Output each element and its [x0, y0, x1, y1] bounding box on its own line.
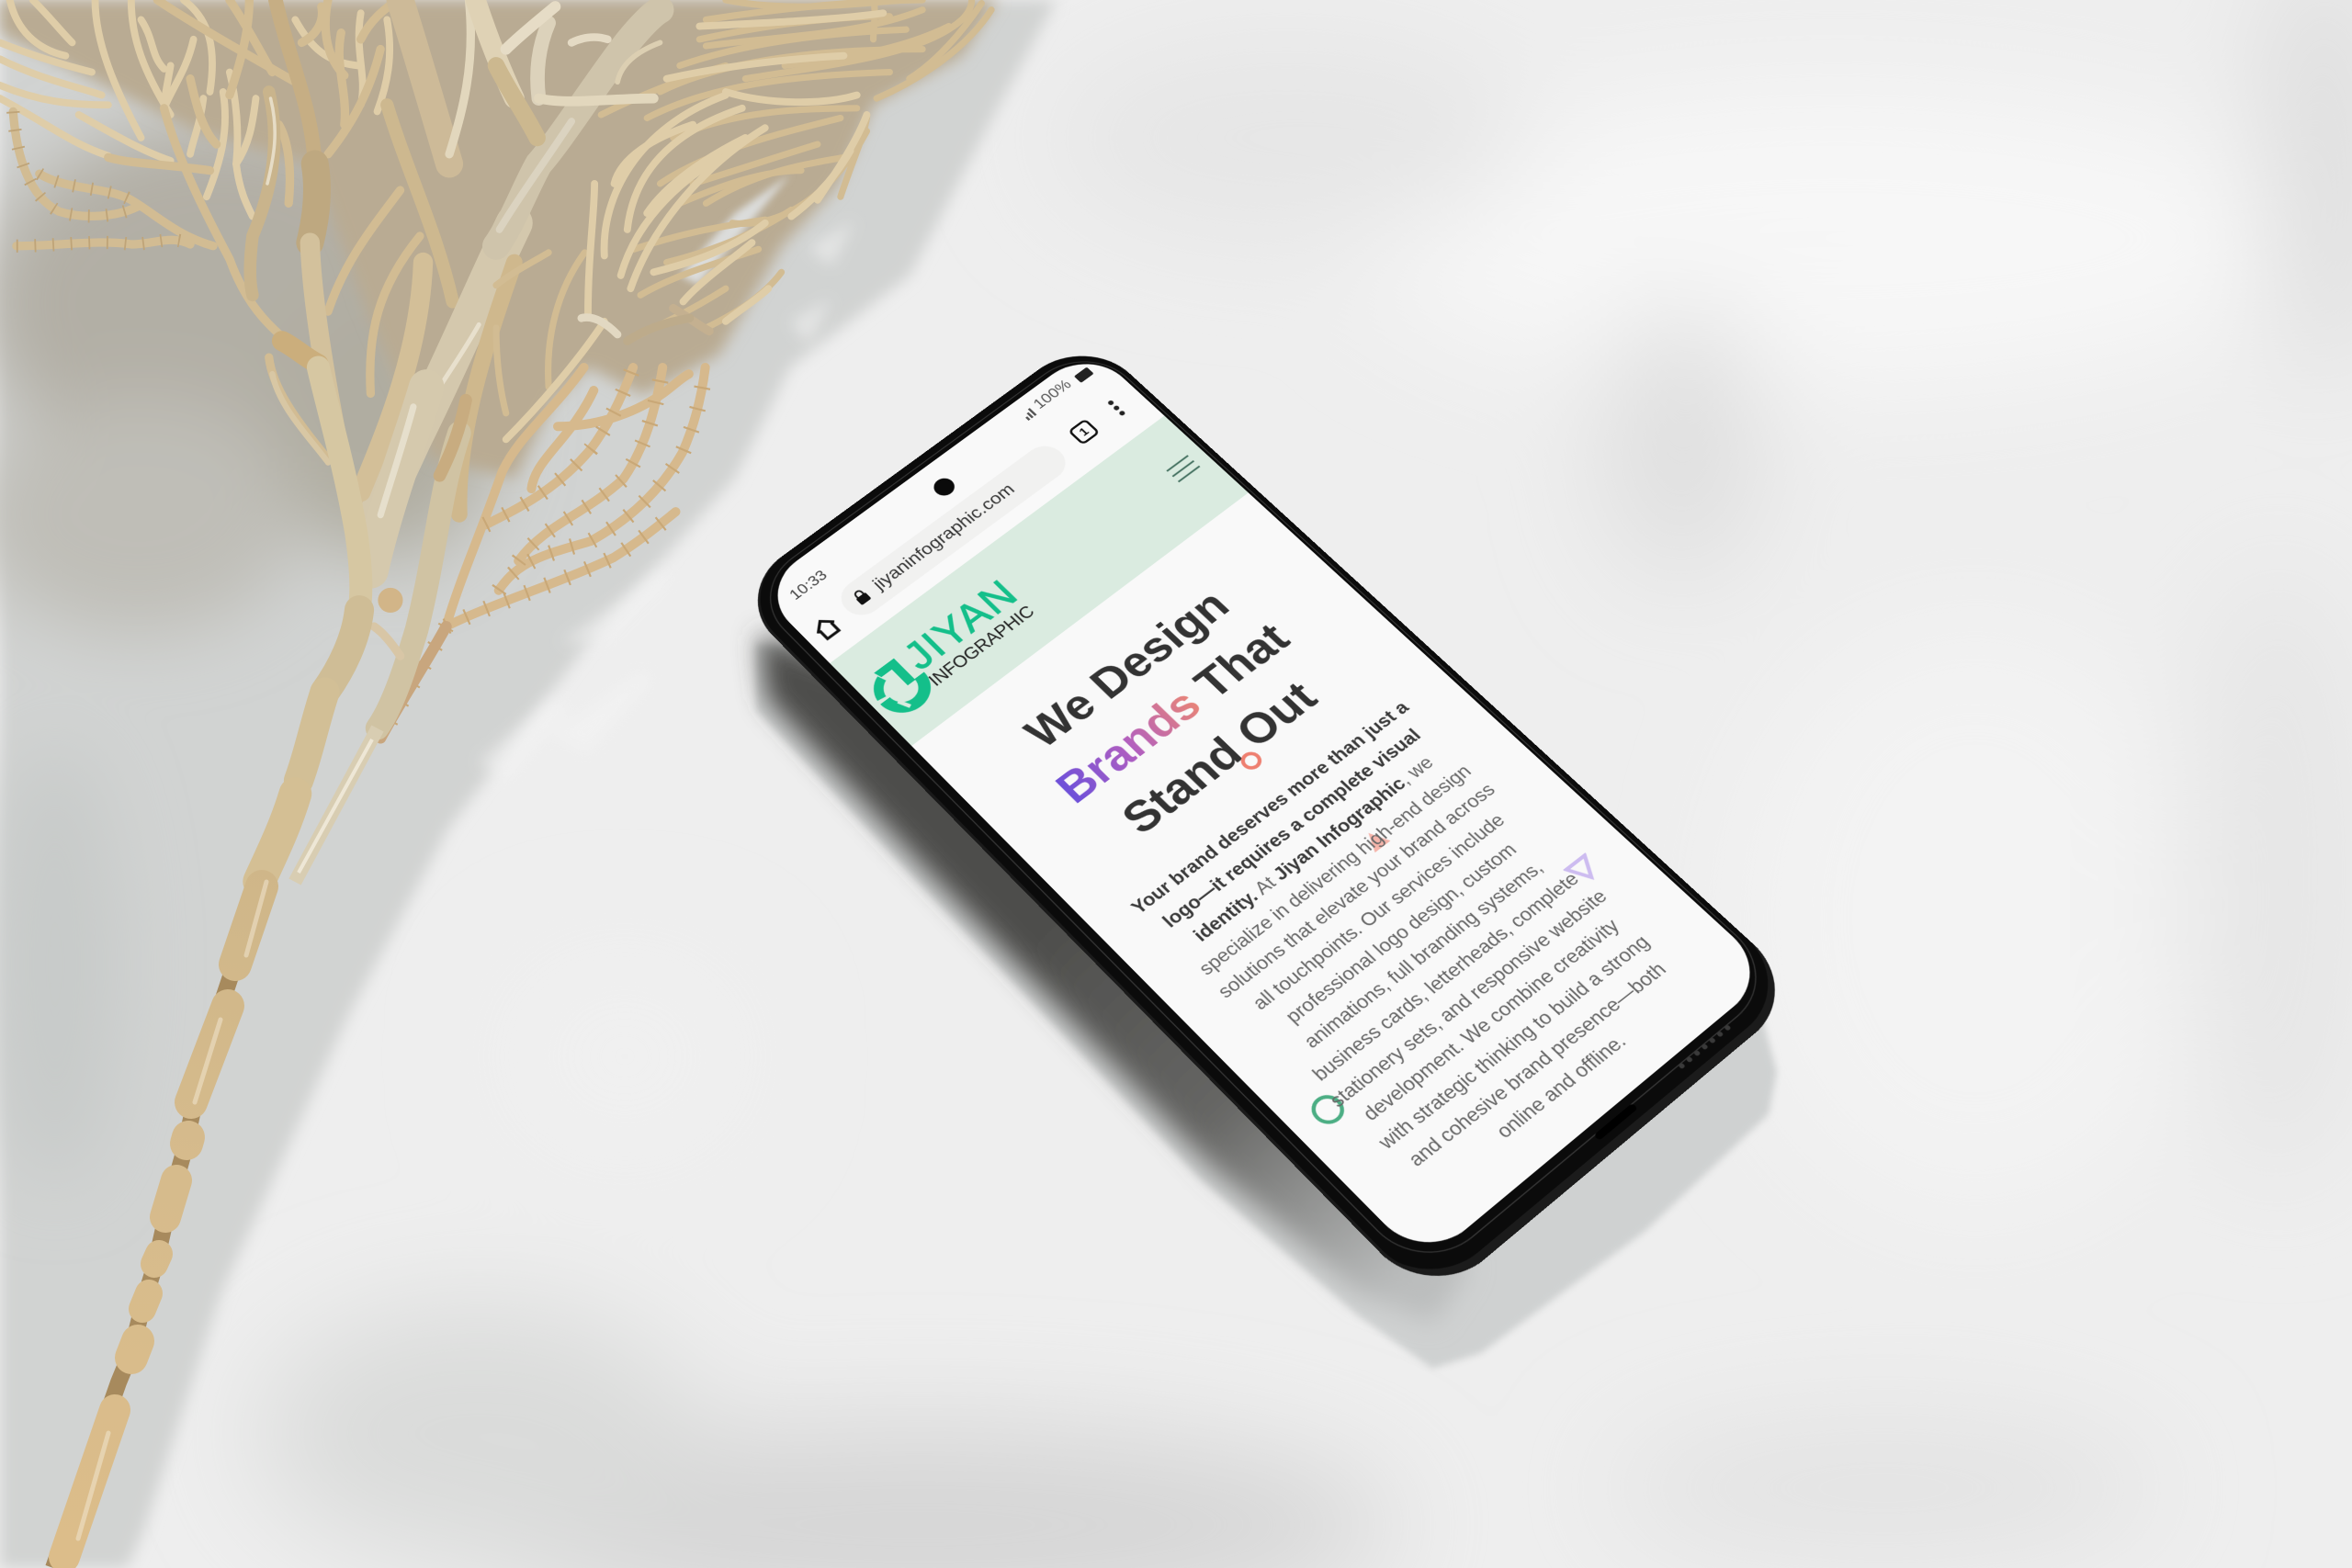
icon: battery: [1074, 367, 1094, 383]
icon: home: [816, 619, 842, 641]
heading: [1014, 581, 1327, 843]
url text: jiyaninfographic.com: [868, 479, 1019, 593]
logo wordmark: JIYAN: [895, 572, 1027, 678]
decoration: green ring: [1305, 1089, 1351, 1130]
plant: left fan: [0, 0, 514, 514]
decoration: purple triangle: [1563, 852, 1595, 880]
status bar signal and battery: [1025, 367, 1093, 421]
body copy: [1126, 697, 1670, 1170]
battery percent: 100%: [1030, 377, 1075, 412]
logo mark: [873, 658, 932, 713]
heading: Brands That: [1046, 614, 1299, 812]
body copy: development. We combine creativity: [1358, 915, 1623, 1125]
icon: signal: [1025, 408, 1036, 421]
heading: Stand Out: [1111, 672, 1327, 843]
body copy: online and offline.: [1491, 1030, 1631, 1143]
url pill: [833, 439, 1074, 622]
body copy: stationery sets, and responsive website: [1325, 886, 1611, 1111]
icon: lock: [854, 590, 871, 605]
icon: front camera: [930, 475, 959, 499]
header band: [830, 416, 1249, 746]
icon: menu dots: [1108, 400, 1125, 416]
decoration: coral ring: [1237, 749, 1266, 773]
icon: tab counter: 1: [1076, 425, 1091, 438]
body copy: professional logo design, custom: [1281, 839, 1521, 1027]
body copy: identity. At Jiyan Infographic, we: [1189, 752, 1438, 945]
body copy: all touchpoints. Our services include: [1248, 809, 1510, 1014]
body copy: logo—it requires a complete visual: [1158, 725, 1425, 931]
status bar time: 10:33: [786, 567, 831, 603]
body copy: with strategic thinking to build a strong: [1374, 931, 1654, 1154]
icon: speaker grille: [1679, 1025, 1731, 1069]
plant: shaded mass behind the twigs: [0, 0, 998, 478]
body copy: business cards, letterheads, complete: [1307, 868, 1583, 1085]
body copy: Your brand deserves more than just a: [1126, 697, 1413, 918]
phone shell: [757, 355, 1775, 1277]
decoration: coral triangle: [1368, 832, 1391, 852]
icon: hamburger: [1166, 455, 1201, 483]
body copy: specialize in delivering high-end design: [1193, 761, 1476, 979]
icon: charging port: [1593, 1103, 1638, 1141]
screen content: [786, 367, 1670, 1170]
icon: tab counter: [1068, 418, 1101, 446]
plant: lower thorny branches: [259, 367, 706, 882]
plant: lower segmented stem: [53, 728, 378, 1568]
logo subtitle: INFOGRAPHIC: [924, 602, 1038, 690]
body copy: animations, full branding systems,: [1299, 857, 1547, 1052]
phone body: [731, 334, 1805, 1304]
screen surface: [757, 347, 1773, 1264]
body copy: solutions that elevate your brand across: [1213, 779, 1499, 1002]
plant: right fan: [496, 0, 991, 439]
phone rim highlight: [746, 342, 1784, 1279]
body copy: and cohesive brand presence—both: [1403, 958, 1670, 1170]
heading: We Design: [1014, 581, 1239, 757]
